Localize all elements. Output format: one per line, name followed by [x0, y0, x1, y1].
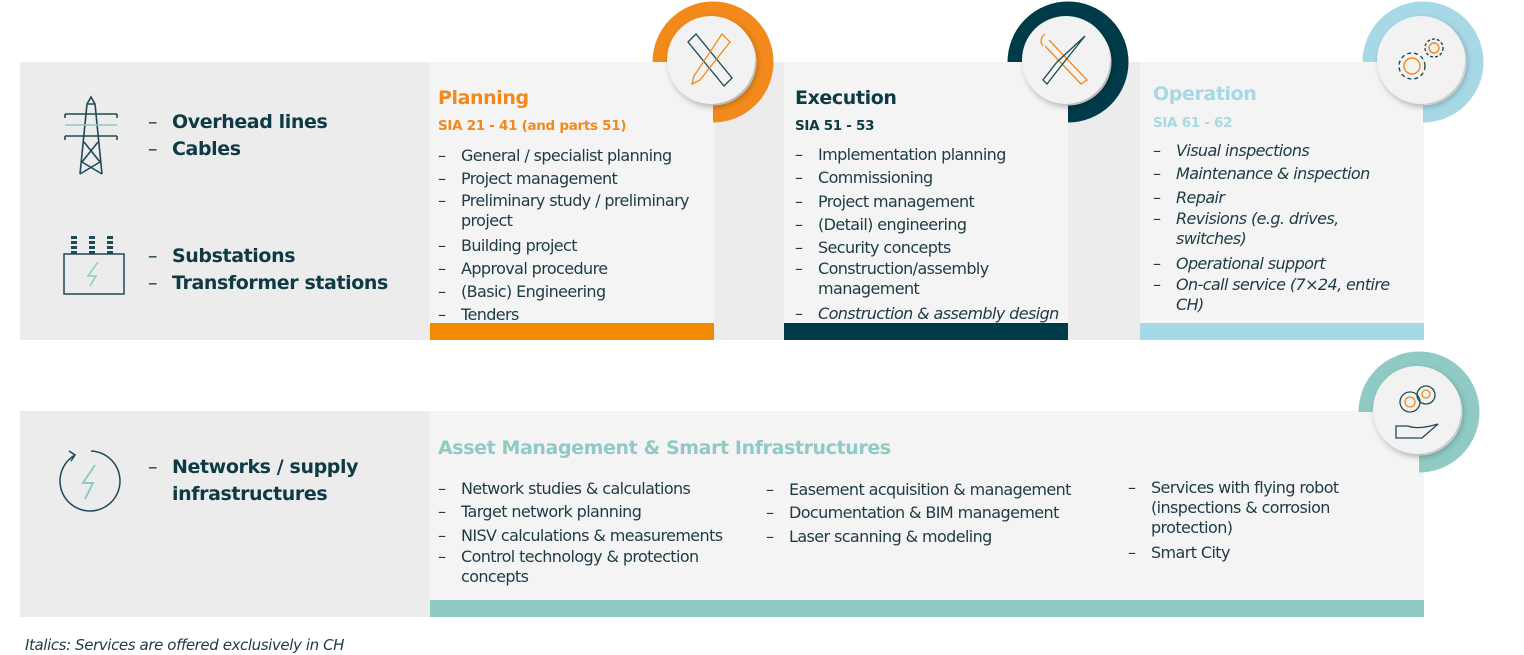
- list: col 1: [438, 479, 723, 586]
- list: planning services: (Basic) Engineering: [461, 282, 606, 301]
- list: col 3: [1128, 478, 1339, 562]
- left block: overhead lines: [64, 96, 327, 175]
- list: execution services: Construction & assembly design: [818, 304, 1059, 323]
- list: col 2: Documentation & BIM management: [789, 503, 1059, 522]
- left block: substations: [63, 236, 388, 295]
- list: operation services: Visual inspections: [1176, 141, 1309, 160]
- list: overhead lines, cables: Cables: [172, 138, 241, 160]
- list: substations: [148, 245, 388, 294]
- subheading: SIA 51 - 53: [795, 118, 874, 134]
- footnote: Italics: Services are offered exclusively in CH: [25, 636, 344, 654]
- list: col 1: Target network planning: [461, 502, 641, 521]
- subheading: SIA 61 - 62: [1153, 115, 1232, 131]
- list: operation services: Maintenance & inspection: [1176, 164, 1370, 183]
- subheading: SIA 21 - 41 (and parts 51): [438, 118, 626, 134]
- list: execution services: Security concepts: [818, 238, 951, 257]
- list: planning services: [438, 146, 689, 324]
- list: planning services: Tenders: [461, 305, 519, 324]
- icon: power pylon: [64, 96, 118, 175]
- list: planning services: Project management: [461, 169, 617, 188]
- bottom band background: [20, 411, 1424, 617]
- list: col 1: Control technology & protection concepts: [461, 547, 699, 586]
- list: col 2: Laser scanning & modeling: [789, 527, 992, 546]
- list: planning services: Approval procedure: [461, 259, 607, 278]
- list: overhead lines, cables: Overhead lines: [172, 111, 327, 133]
- panel: planning: [430, 62, 714, 340]
- list: planning services: Preliminary study / preliminary project: [461, 191, 689, 230]
- heading: asset management: Asset Management & Smart Infrastructures: [438, 437, 891, 459]
- list: substations: Transformer stations: [172, 272, 388, 294]
- panel: operation: [1140, 62, 1424, 340]
- list: networks: [148, 456, 358, 505]
- list: execution services: [796, 145, 1059, 323]
- top band background: [20, 62, 1424, 340]
- list: execution services: (Detail) engineering: [818, 215, 966, 234]
- panel: asset management: [430, 411, 1424, 617]
- list: execution services: Commissioning: [818, 168, 933, 187]
- list: col 1: NISV calculations & measurements: [461, 526, 723, 545]
- list: col 2: Easement acquisition & management: [789, 480, 1071, 499]
- list: col 3: Smart City: [1151, 543, 1230, 562]
- icon: transformer: [63, 236, 125, 295]
- list: substations: Substations: [172, 245, 295, 267]
- icon: execution circle: [1008, 2, 1128, 122]
- list: col 2: [766, 480, 1071, 546]
- list: operation services: On-call service (7×24, entire CH): [1176, 275, 1390, 314]
- bar: dark: [784, 323, 1068, 340]
- list: networks: infrastructures: [172, 483, 327, 505]
- bar: orange: [430, 323, 714, 340]
- icon: asset management circle: [1358, 352, 1480, 472]
- list: col 3: Services with flying robot (inspections & corrosion protection): [1151, 478, 1339, 537]
- list: operation services: [1154, 141, 1390, 314]
- list: networks: Networks / supply: [172, 456, 358, 478]
- list: planning services: General / specialist planning: [461, 146, 672, 165]
- list: operation services: Operational support: [1176, 254, 1325, 273]
- bar: teal: [430, 600, 1424, 617]
- heading: execution: Execution: [795, 87, 896, 109]
- list: overhead lines, cables: [148, 111, 327, 160]
- icon: planning circle: [652, 2, 774, 122]
- list: operation services: Repair: [1176, 188, 1224, 207]
- icon: operation circle: [1362, 2, 1484, 122]
- list: col 1: Network studies & calculations: [461, 479, 690, 498]
- panel: execution: [784, 62, 1068, 340]
- heading: operation: Operation: [1153, 83, 1256, 105]
- list: operation services: Revisions (e.g. drives, switches): [1176, 209, 1339, 248]
- list: execution services: Construction/assembly management: [818, 259, 989, 298]
- list: planning services: Building project: [461, 236, 577, 255]
- list: execution services: Project management: [818, 192, 974, 211]
- heading: planning: Planning: [438, 87, 529, 109]
- icon: cycle lightning: [59, 450, 121, 512]
- bar: light blue: [1140, 323, 1424, 340]
- left block: networks: [59, 450, 358, 512]
- list: execution services: Implementation planning: [818, 145, 1006, 164]
